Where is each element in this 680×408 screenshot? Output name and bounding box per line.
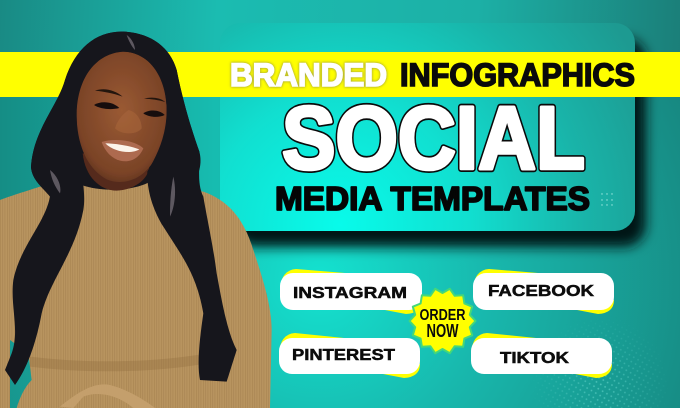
earrings bbox=[66, 128, 71, 149]
lips bbox=[102, 140, 143, 161]
title: social: SOCIAL bbox=[282, 88, 585, 188]
teeth bbox=[105, 143, 139, 152]
eyes bbox=[94, 102, 119, 109]
back hair bbox=[31, 32, 201, 197]
face bbox=[77, 52, 167, 182]
pill: pinterest bbox=[279, 333, 420, 378]
halftone dots bbox=[542, 326, 660, 408]
sweater shade bbox=[30, 353, 207, 371]
waist tie bbox=[60, 384, 155, 408]
sweater bbox=[0, 183, 272, 408]
title: social: SOCIAL bbox=[282, 88, 585, 188]
decorative dots icon bbox=[601, 193, 613, 206]
nose bbox=[115, 110, 142, 133]
pill: facebook: FACEBOOK bbox=[488, 283, 595, 300]
badge: order now: ORDER bbox=[420, 307, 466, 324]
badge: order now: NOW bbox=[426, 321, 458, 341]
pill: facebook bbox=[473, 269, 614, 314]
pill: pinterest: PINTEREST bbox=[292, 347, 396, 364]
heading: branded infographics: BRANDED bbox=[230, 57, 387, 93]
pill: instagram bbox=[280, 269, 422, 314]
panel bbox=[220, 23, 635, 231]
pill: tiktok: TIKTOK bbox=[500, 350, 570, 367]
heading: branded infographics: BRANDED bbox=[230, 57, 387, 93]
pill: instagram: INSTAGRAM bbox=[293, 285, 407, 302]
woman portrait bbox=[0, 32, 272, 408]
hair shine bbox=[50, 35, 175, 217]
panel shadow bbox=[232, 38, 646, 247]
brows bbox=[95, 89, 123, 97]
heading: branded infographics: INFOGRAPHICS bbox=[400, 57, 635, 93]
hair top bbox=[5, 32, 237, 385]
badge: order now bbox=[410, 289, 476, 353]
neck bbox=[83, 153, 150, 191]
yellow band bbox=[0, 52, 680, 97]
subtitle: media templates: MEDIA TEMPLATES bbox=[275, 181, 590, 218]
heading: branded infographics bbox=[230, 57, 635, 93]
pill: tiktok bbox=[471, 333, 612, 378]
